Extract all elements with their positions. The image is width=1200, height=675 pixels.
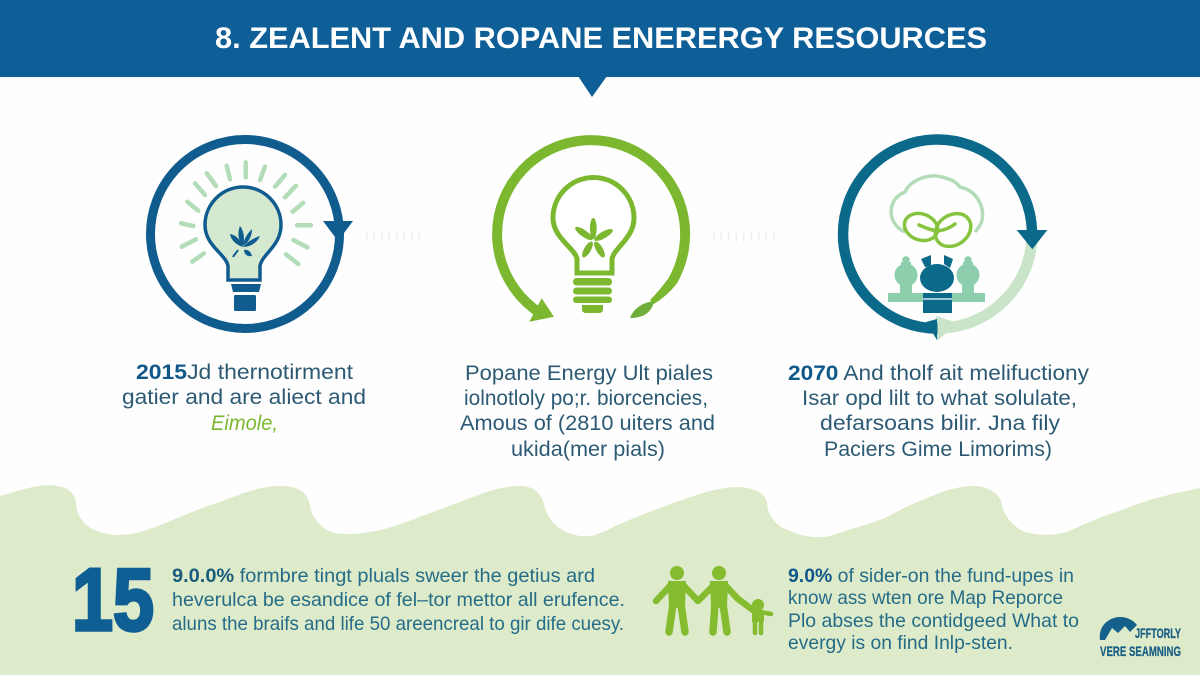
wave background panel	[0, 485, 1200, 675]
text block: column 3: Paciers Gime Limorims)	[824, 438, 1052, 461]
text block: bottom left: 9.0.0% formbre tingt pluals sweer the getius ard	[172, 565, 595, 587]
text block: column 2: iolnotloly po;r. biorcencies,	[464, 387, 708, 410]
header banner	[0, 0, 1200, 97]
text block: column 3	[788, 362, 1090, 461]
text block: column 1: gatier and are aliect and	[122, 386, 366, 409]
text block: column 3: defarsoans bilir. Jna fily	[820, 412, 1061, 435]
logo	[1100, 617, 1181, 659]
connector dots 2	[713, 233, 776, 241]
connector dots 1	[366, 233, 426, 241]
icon: blue cycle light bulb	[150, 140, 353, 328]
text block: column 3: 2070 And tholf ait melifuctiony	[788, 362, 1090, 385]
text block: column 2: Popane Energy Ult piales	[465, 362, 713, 385]
text block: bottom right: evergy is on find Inlp-sten.	[788, 632, 1013, 654]
text block: column 1: Eimole,	[211, 412, 278, 435]
text block: bottom right	[788, 565, 1079, 654]
text block: column 1: 2015Jd thernotirment	[136, 361, 353, 384]
text block: column 2: ukida(mer pials)	[511, 438, 665, 461]
text block: bottom right: 9.0% of sider-on the fund-upes in	[788, 565, 1074, 587]
icon: green cycle light bulb	[497, 140, 685, 322]
icon: family	[656, 566, 771, 633]
text block: bottom left	[172, 565, 625, 635]
big number: 15	[72, 550, 154, 649]
text block: bottom left: aluns the braifs and life 50 areencreal to gir dife cuesy.	[172, 613, 624, 635]
text block: bottom right: know ass wten ore Map Reporce	[788, 587, 1063, 609]
header pointer	[578, 76, 607, 97]
text block: bottom left: heverulca be esandice of fel–tor mettor all erufence.	[172, 589, 625, 611]
text block: bottom right: Plo abses the contidgeed What to	[788, 610, 1079, 632]
text block: column 3: Isar opd lilt to what solulate,	[802, 387, 1077, 410]
title: 8. ZEALENT AND ROPANE ENERERGY RESOURCES	[215, 22, 987, 55]
text block: column 1	[122, 361, 366, 435]
text block: column 2	[460, 362, 715, 461]
icon: teal cycle with cloud and people	[843, 140, 1047, 341]
text block: column 2: Amous of (2810 uiters and	[460, 412, 715, 435]
